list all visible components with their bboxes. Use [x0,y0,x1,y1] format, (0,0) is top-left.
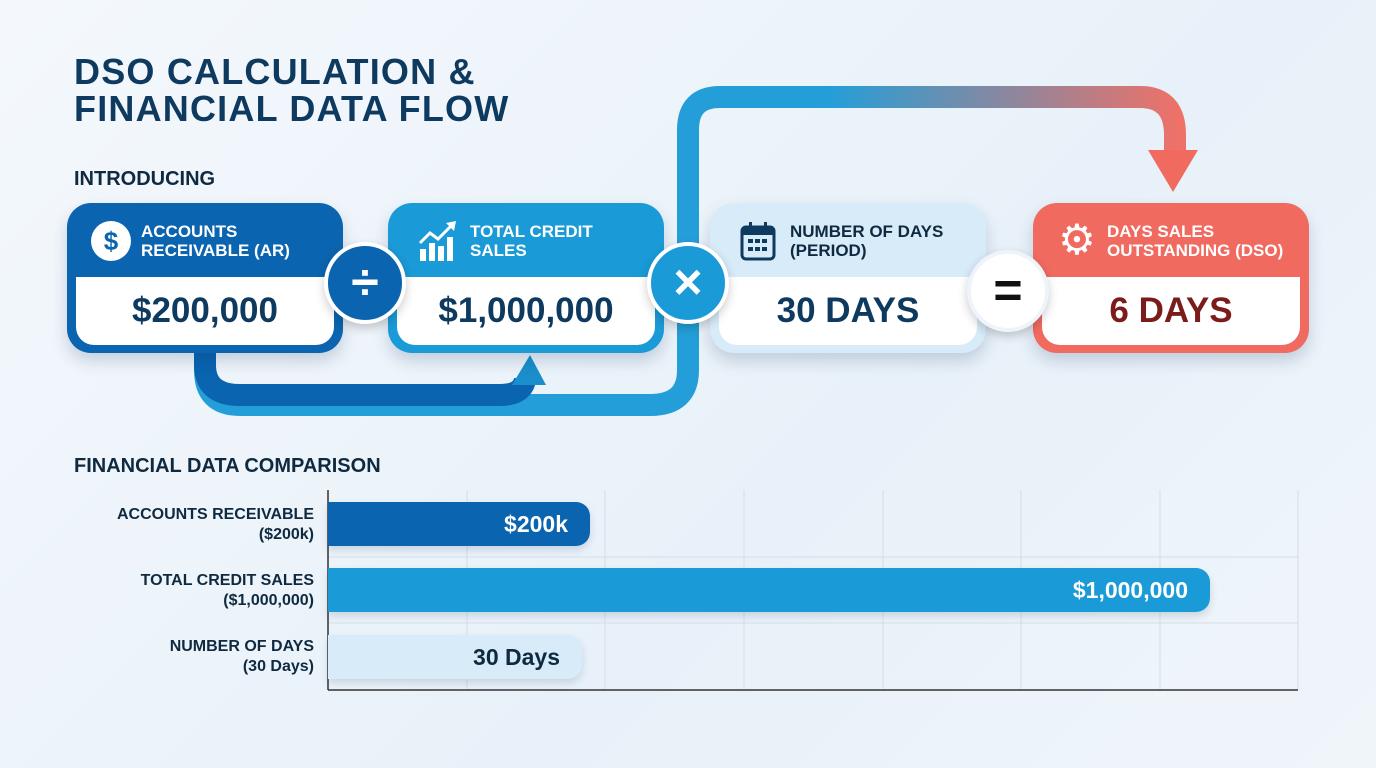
card: accounts receivable [67,203,343,353]
icon: chart [419,221,456,261]
heading: financial data comparison: FINANCIAL DATA COMPARISON [74,455,381,477]
card: number of days: 30 DAYS [777,291,919,330]
card: accounts receivable: RECEIVABLE (AR) [141,241,290,260]
operator: multiply: × [673,254,703,310]
card: number of days: NUMBER OF DAYS [790,222,943,241]
card: accounts receivable: $200,000 [132,291,278,330]
card: DSO: OUTSTANDING (DSO) [1107,241,1283,260]
card: DSO: 6 DAYS [1109,291,1233,330]
label: days [170,638,314,675]
operator: multiply [647,242,729,324]
icon: dollar [91,221,131,261]
card: total credit sales: $1,000,000 [438,291,614,330]
heading: introducing: INTRODUCING [74,168,215,190]
label: AR: ACCOUNTS RECEIVABLE [117,506,314,523]
bar chart [117,490,1298,691]
operator: divide: ÷ [351,254,379,310]
label: credit sales: TOTAL CREDIT SALES [141,572,314,589]
icon: gear: ⚙ [1058,216,1096,263]
card: accounts receivable: ACCOUNTS [141,222,237,241]
bar: days [328,635,582,679]
card: DSO [1033,203,1309,353]
icon: calendar [740,222,776,260]
card: total credit sales: TOTAL CREDIT [470,222,593,241]
label: days: NUMBER OF DAYS [170,638,314,655]
card: number of days [710,203,986,353]
card: total credit sales: SALES [470,241,527,260]
operator: divide [324,242,406,324]
card: DSO: DAYS SALES [1107,222,1214,241]
card: number of days: (PERIOD) [790,241,866,260]
icon: dollar: $ [104,226,118,256]
label: AR: ($200k) [259,526,314,543]
operator: equals [967,250,1049,332]
card: total credit sales [388,203,664,353]
label: credit sales: ($1,000,000) [223,592,314,609]
operator: equals: = [993,262,1023,318]
title: FINANCIAL DATA FLOW [74,88,509,129]
label: days: (30 Days) [243,658,314,675]
bar: days: 30 Days [473,644,560,670]
title [74,51,509,129]
bar: credit sales [328,568,1210,612]
label: AR [117,506,314,543]
bar: credit sales: $1,000,000 [1073,577,1188,603]
bar: AR [328,502,590,546]
title: DSO CALCULATION & [74,51,476,92]
bar: AR: $200k [504,511,568,537]
label: credit sales [140,572,314,609]
